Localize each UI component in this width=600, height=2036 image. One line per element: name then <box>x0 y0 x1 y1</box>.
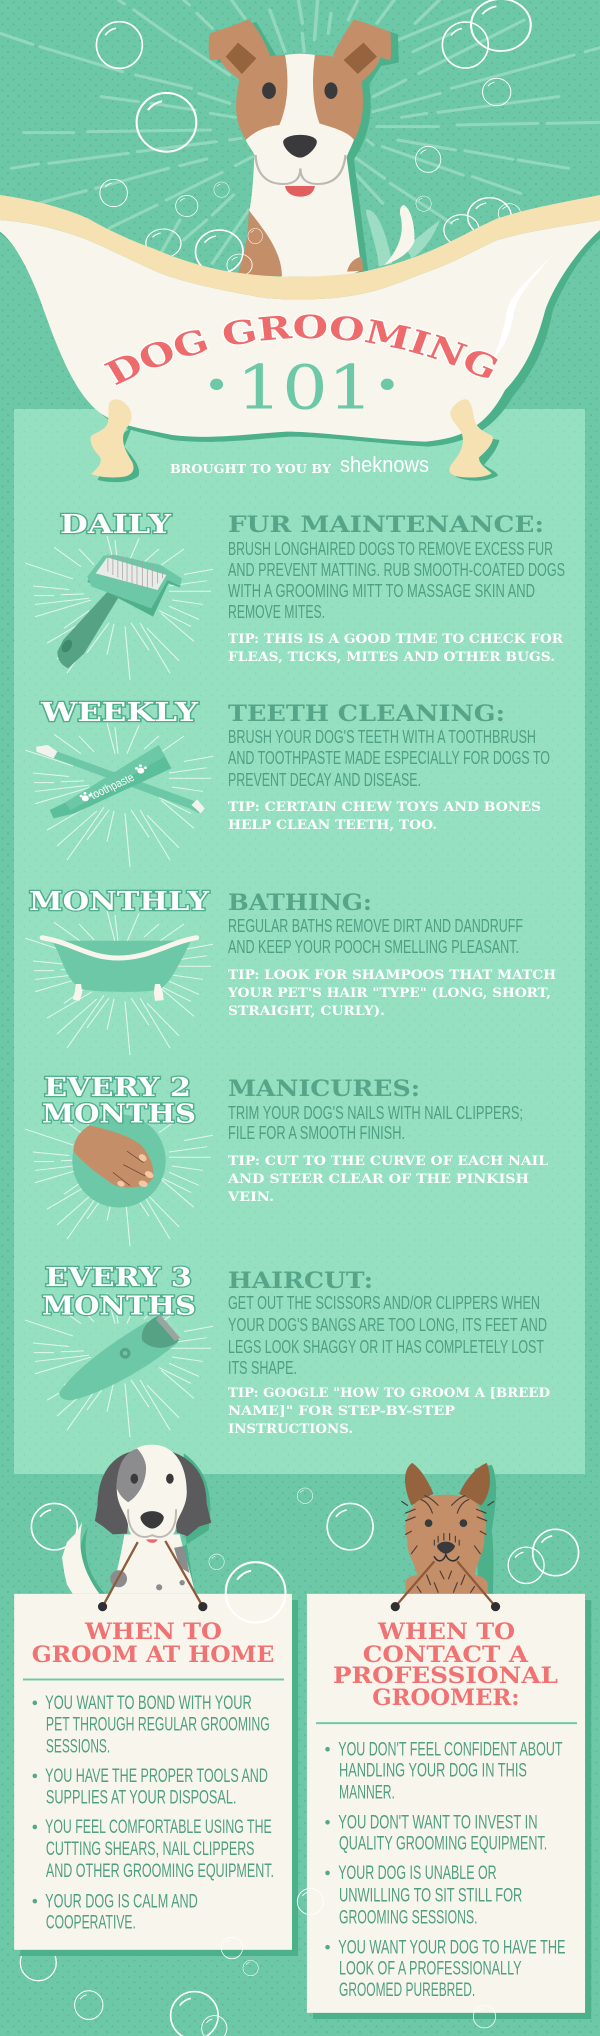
tip: TIP: CUT TO THE CURVE OF EACH NAIL <box>228 1154 548 1169</box>
label: every 3 months: EVERY 3 <box>45 1263 192 1293</box>
hanging strings <box>98 1541 500 1611</box>
tip: NAME]" FOR STEP-BY-STEP <box>228 1404 455 1419</box>
list: MANNER. <box>339 1782 395 1803</box>
heading: PROFESSIONAL <box>333 1663 558 1689</box>
dog shadow <box>217 22 399 279</box>
tip: TIP: THIS IS A GOOD TIME TO CHECK FOR <box>228 632 563 647</box>
eyes and nose <box>425 1519 432 1527</box>
list <box>45 1693 274 1934</box>
sponsor line <box>170 452 429 477</box>
heading: CONTACT A <box>363 1642 529 1668</box>
label: daily: DAILY <box>60 510 172 540</box>
eyes and nose <box>130 1474 138 1484</box>
content panel <box>14 409 585 1474</box>
card: contact a professional groomer <box>307 1594 585 2013</box>
tub shadow <box>0 220 600 447</box>
header illustration <box>0 0 600 482</box>
list: YOU FEEL COMFORTABLE USING THE <box>45 1817 272 1838</box>
label: every 3 months: MONTHS <box>42 1292 196 1322</box>
tip: YOUR PET'S HAIR "TYPE" (LONG, SHORT, <box>227 986 551 1001</box>
tub rim <box>0 195 600 299</box>
bubbles behind cards <box>20 1488 579 2036</box>
label: every 2 months <box>42 1073 196 1130</box>
title: dog grooming: DOG GROOMING <box>102 313 500 386</box>
list: YOUR DOG IS CALM AND <box>45 1891 198 1912</box>
tip <box>228 632 563 665</box>
heading: GROOM AT HOME <box>32 1642 274 1668</box>
dog <box>209 19 391 277</box>
body text <box>228 1102 523 1143</box>
eyes <box>262 82 276 99</box>
left tub foot <box>98 427 139 482</box>
nose <box>283 135 317 158</box>
tip: TIP: CERTAIN CHEW TOYS AND BONES <box>228 800 541 815</box>
tip <box>227 968 556 1019</box>
body text: PREVENT DECAY AND DISEASE. <box>228 769 421 790</box>
heading: WHEN TO <box>377 1619 515 1645</box>
tongue <box>285 186 315 197</box>
right tub foot <box>455 437 499 481</box>
section: daily <box>25 510 565 680</box>
head <box>405 1495 486 1594</box>
icon: toothbrush and toothpaste: toothpaste <box>87 771 137 802</box>
tip <box>228 800 541 833</box>
section: weekly <box>25 698 550 867</box>
list: GROOMING SESSIONS. <box>339 1907 478 1929</box>
tip <box>227 1154 548 1205</box>
heading <box>333 1619 558 1711</box>
card: groom at home <box>14 1594 292 1950</box>
icon: brush <box>57 554 182 668</box>
splash behind tail <box>365 210 440 267</box>
bullets <box>33 1701 37 1903</box>
label: every 2 months: MONTHS <box>42 1100 196 1130</box>
list: YOU WANT TO BOND WITH YOUR <box>45 1693 252 1714</box>
dog tail <box>385 205 415 265</box>
tip: AND STEER CLEAR OF THE PINKISH <box>227 1172 529 1187</box>
label: monthly: MONTHLY <box>29 887 210 917</box>
title: 101: 101 <box>236 353 373 423</box>
dog head <box>236 55 363 147</box>
heading: manicures: MANICURES: <box>228 1076 420 1102</box>
spaniel dog <box>62 1445 211 1594</box>
list: SESSIONS. <box>46 1736 110 1757</box>
fur marks <box>402 1496 494 1592</box>
section: every 2 months <box>25 1073 548 1246</box>
icon: clippers <box>59 1312 182 1400</box>
tip: TIP: LOOK FOR SHAMPOOS THAT MATCH <box>228 968 556 983</box>
sunburst <box>25 1102 213 1246</box>
list: GROOMED PUREBRED. <box>339 1980 475 2001</box>
list: AND OTHER GROOMING EQUIPMENT. <box>46 1861 274 1882</box>
dog body <box>249 155 362 277</box>
head <box>117 1445 187 1541</box>
body text <box>228 1292 547 1378</box>
heading: bathing: BATHING: <box>228 890 372 916</box>
tip: INSTRUCTIONS. <box>228 1422 353 1437</box>
terrier dog <box>402 1463 496 1594</box>
sponsor line: sheknows <box>340 452 429 477</box>
heading: haircut: HAIRCUT: <box>228 1268 373 1294</box>
label: weekly: WEEKLY <box>40 698 199 728</box>
muzzle line <box>128 1509 176 1537</box>
bubbles in front of dog <box>227 228 262 276</box>
list: COOPERATIVE. <box>46 1913 136 1934</box>
heading: GROOMER: <box>372 1685 520 1711</box>
tub highlight <box>490 254 553 362</box>
list: PET THROUGH REGULAR GROOMING <box>46 1714 270 1735</box>
list <box>338 1739 566 2001</box>
bubbles behind tub <box>96 0 531 273</box>
heading <box>32 1619 274 1668</box>
body text <box>228 726 550 790</box>
bubbles over cards <box>221 1562 496 2028</box>
list: YOU HAVE THE PROPER TOOLS AND <box>45 1766 268 1787</box>
bottom section <box>14 1445 591 2036</box>
body text: ITS SHAPE. <box>228 1357 297 1378</box>
sunburst <box>25 723 213 867</box>
tip <box>228 1386 550 1437</box>
shadow <box>474 1465 496 1594</box>
sponsor line: BROUGHT TO YOU BY <box>170 462 331 476</box>
mouth <box>256 155 346 184</box>
tip: TIP: GOOGLE "HOW TO GROOM A [BREED <box>228 1386 550 1401</box>
label: every 2 months: EVERY 2 <box>44 1073 191 1103</box>
heading: WHEN TO <box>84 1619 222 1645</box>
bullets <box>325 1747 330 1949</box>
sunburst <box>25 536 213 680</box>
body text <box>228 915 523 957</box>
section: monthly <box>25 887 556 1055</box>
tip: FLEAS, TICKS, MITES AND OTHER BUGS. <box>228 650 555 665</box>
tip: VEIN. <box>227 1190 274 1205</box>
tail <box>80 1527 105 1594</box>
ears <box>405 1463 434 1505</box>
sunburst <box>25 911 213 1055</box>
heading: fur maintenance: FUR MAINTENANCE: <box>228 512 544 538</box>
body text <box>228 538 565 622</box>
sunburst <box>25 1293 213 1437</box>
ears <box>95 1451 132 1534</box>
sunburst rays behind dog <box>0 0 600 263</box>
list: SUPPLIES AT YOUR DISPOSAL. <box>46 1787 236 1808</box>
ear shadow <box>180 1453 210 1594</box>
icon: mini bathtub <box>42 938 197 1001</box>
bathtub body <box>0 220 600 442</box>
body <box>111 1534 195 1594</box>
label: every 3 months <box>42 1263 196 1322</box>
body text: FILE FOR A SMOOTH FINISH. <box>228 1122 405 1143</box>
icon: toothbrush and toothpaste <box>36 745 205 818</box>
list: CUTTING SHEARS, NAIL CLIPPERS <box>46 1839 254 1860</box>
section: every 3 months <box>25 1263 550 1437</box>
heading: teeth cleaning: TEETH CLEANING: <box>228 701 505 727</box>
list: YOUR DOG IS UNABLE OR <box>338 1863 497 1884</box>
ears <box>209 19 270 83</box>
eye patch <box>117 1449 146 1502</box>
tip: HELP CLEAN TEETH, TOO. <box>228 818 437 833</box>
white stripe and muzzle <box>246 54 354 185</box>
body <box>406 1575 488 1594</box>
body text: REMOVE MITES. <box>228 601 325 622</box>
tip: STRAIGHT, CURLY). <box>228 1004 385 1019</box>
icon: paw <box>72 1114 166 1207</box>
card shadows <box>20 1600 591 2019</box>
